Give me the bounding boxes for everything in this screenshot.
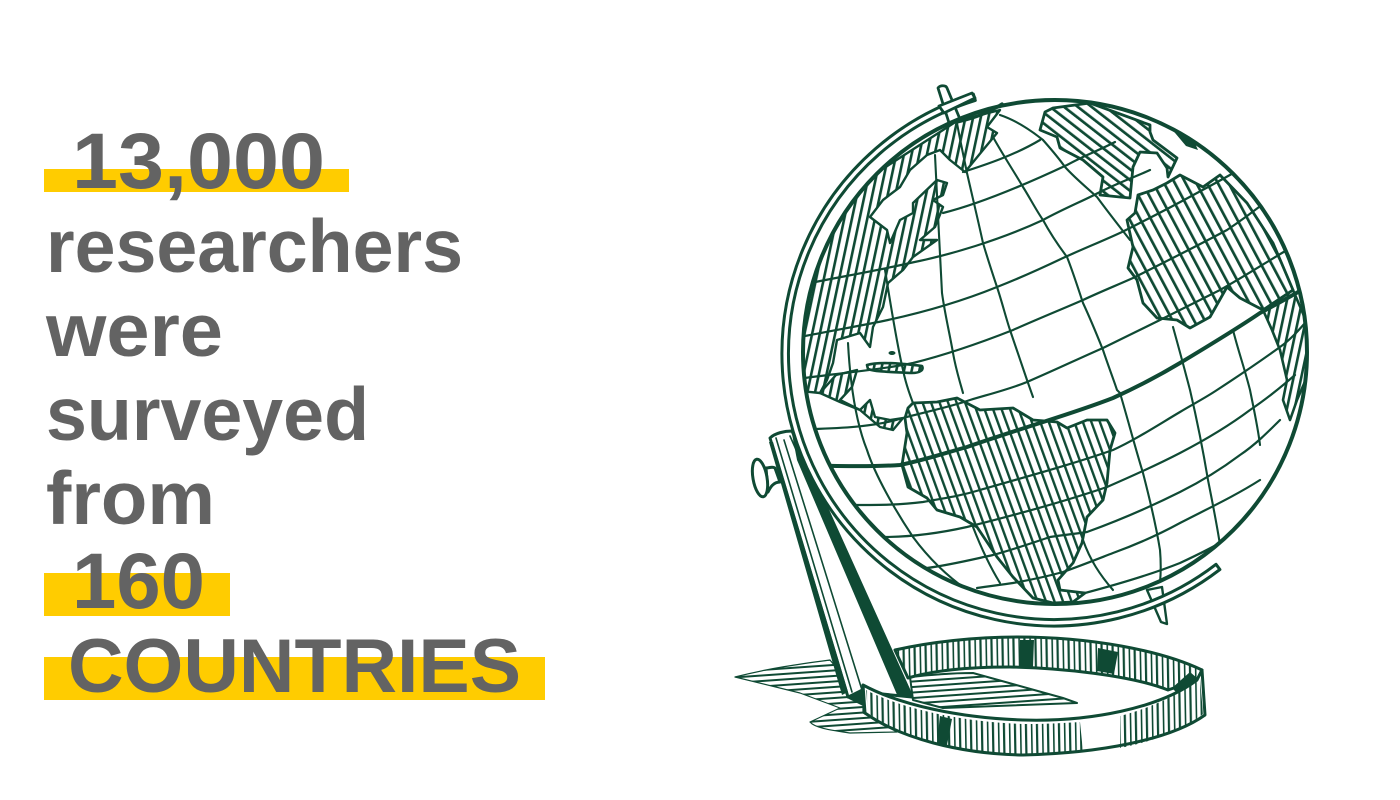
land: small island <box>888 351 896 355</box>
stand knob <box>750 458 780 498</box>
base shadow on the ground <box>735 660 897 733</box>
highlight bar: COUNTRIES <box>44 657 545 700</box>
equator <box>806 285 1310 466</box>
ring crossbar at the top <box>939 93 975 113</box>
headline text: surveyed <box>46 372 369 456</box>
base ring dark patches <box>1020 640 1197 693</box>
land: top edge wedge <box>1174 132 1198 150</box>
globe outline <box>803 100 1307 604</box>
meridians <box>848 115 1260 590</box>
parallels <box>805 140 1305 593</box>
headline text: 13,000 <box>72 116 325 205</box>
headline text: from <box>46 456 215 540</box>
base ring front hatching <box>866 678 1203 755</box>
headline text: researchers <box>46 204 463 288</box>
land: North America <box>790 110 1000 393</box>
headline text: were <box>45 288 223 372</box>
land: Africa <box>1127 175 1293 328</box>
base ring back face <box>895 637 1202 690</box>
north pole highlight <box>957 104 1002 122</box>
land: South America <box>902 398 1115 603</box>
land: Europe and Asia <box>1040 103 1177 198</box>
headline text: COUNTRIES <box>68 624 521 709</box>
headline text <box>45 116 521 709</box>
highlight bar: 160 <box>44 573 230 616</box>
land: Central America <box>820 370 903 430</box>
land: Cuba <box>867 363 923 373</box>
top axis pin <box>938 86 962 126</box>
stand post <box>769 431 912 706</box>
bottom axis pin <box>1147 587 1167 624</box>
base ring front dark patch <box>937 716 952 745</box>
headline text: 160 <box>72 536 205 625</box>
base ring front face <box>863 670 1205 755</box>
highlight bar: 13,000 <box>44 169 349 192</box>
land: right edge landmass <box>1263 290 1310 420</box>
landmasses and grid <box>790 103 1310 603</box>
meridian ring (bottom and left arc) <box>782 94 1220 626</box>
globe sphere <box>803 100 1307 604</box>
illustration: globe on stand <box>735 86 1310 755</box>
shadow inside the base ring <box>910 673 1077 708</box>
